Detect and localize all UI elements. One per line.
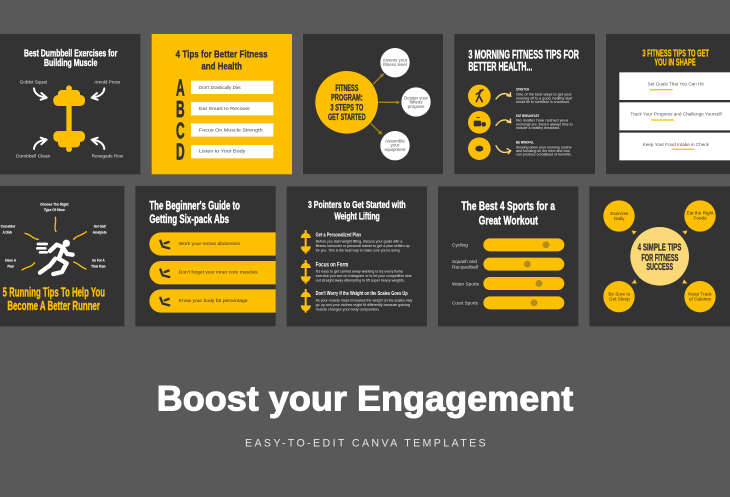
tip text: mindful: BE MINDFUL <box>516 140 534 145</box>
heading: shape tips: YOU IN SHAPE <box>654 58 696 69</box>
panel: morning tips <box>454 34 595 174</box>
step circles: program <box>408 104 425 109</box>
main title: Boost your Engagement <box>157 380 574 419</box>
tip boxes: Eat Smart to Recover <box>199 106 250 112</box>
step circles: fitness level <box>383 62 407 67</box>
tip text: stretch: STRETCH <box>516 87 529 92</box>
heading: morning tips: 3 MORNING FITNESS TIPS FOR <box>468 47 579 61</box>
tip text: mindful: can produce a boatload of benefits. <box>516 153 572 157</box>
pills: Know your body fat percentage <box>179 298 248 303</box>
heading: six-pack abs: The Beginner's Guide to <box>149 198 240 212</box>
heading: dumbbell exercises <box>24 49 117 69</box>
heading: best sports: The Best 4 Sports for a <box>461 199 555 213</box>
letters A to D: A <box>176 75 185 101</box>
heading: dumbbell exercises: Best Dumbbell Exercises for <box>24 49 117 60</box>
step circles <box>380 48 431 160</box>
panel: six-pack abs <box>135 186 276 326</box>
tip circles: Eat the Right <box>687 210 714 215</box>
running tip labels: Trial Run <box>91 263 106 268</box>
tip text: breakfast: mornings are, there's always time to <box>516 122 573 126</box>
tip text: breakfast: EAT BREAKFAST <box>516 113 540 118</box>
tip boxes <box>191 81 273 158</box>
panel: weight lifting <box>287 186 427 326</box>
tip text: stretch <box>516 87 572 104</box>
sport labels: Squash and <box>452 259 477 265</box>
pointer: personalized plan: fitness instructor or personal trainer to get a plan written up <box>316 244 410 248</box>
heading: morning tips <box>468 47 579 74</box>
icon: runner <box>37 240 73 274</box>
center circle <box>630 227 689 286</box>
tip text: breakfast <box>516 113 573 130</box>
heading: four tips: 4 Tips for Better Fitness <box>176 50 268 61</box>
triangle pointers <box>632 230 687 284</box>
tip text: breakfast: No matter how rushed your <box>516 119 569 123</box>
running tip labels <box>1 201 107 268</box>
heading: weight lifting: Weight Lifting <box>334 211 380 222</box>
pointer: weight on scales: go up and your clothes might fit differently because gaining <box>316 303 410 307</box>
heading: best sports <box>461 199 555 228</box>
panel: simple tips <box>589 186 730 326</box>
tip circles: Be Sure to <box>608 291 631 296</box>
tip boxes: Don't Drastically Diet <box>199 85 241 91</box>
tip text: stretch: morning off to a good, healthy start <box>516 96 572 100</box>
running tip labels: Analysis <box>93 230 107 235</box>
running tip labels: Type Of Shoe <box>44 207 65 212</box>
tip text: mindful: and focusing on the here and now <box>516 149 570 153</box>
main circle: GET STARTED <box>328 112 366 122</box>
heading: best sports: Great Workout <box>479 214 538 228</box>
panel: fitness program <box>303 34 443 174</box>
step circles: Design your <box>404 95 428 100</box>
heading: weight lifting: 3 Pointers to Get Started with <box>308 200 406 211</box>
tip circles: of Calories <box>689 296 712 301</box>
pointer: focus on form: It's easy to get carried away wanting to try every funky <box>316 270 403 274</box>
heading: morning tips: BETTER HEALTH... <box>468 60 532 74</box>
icons: dumbbells <box>301 230 311 313</box>
heading: shape tips <box>642 48 709 69</box>
pointer: focus on form: out straight away attempting to lift super heavy weights. <box>316 278 405 282</box>
sport labels: Water Sports <box>452 281 480 287</box>
center circle: SUCCESS <box>646 262 673 273</box>
pointer: focus on form: exercise you see on Instagram or to let your competitive side <box>316 274 412 278</box>
heading: four tips <box>176 50 268 72</box>
panel: dumbbell exercises <box>0 34 140 174</box>
tip cards: Keep Your Food Intake in Check <box>643 142 710 147</box>
pills: Don't forget your inner core muscles <box>179 270 258 275</box>
tip text: mindful: Slowing down your morning routine <box>516 145 572 149</box>
tip circles <box>603 200 716 312</box>
pointer: weight on scales: muscle changes your body composition. <box>316 307 380 311</box>
tip cards: Set Goals That You Can Hit <box>648 82 704 87</box>
exercise labels: Dumbbell Clean <box>16 153 51 158</box>
letters A to D: C <box>176 117 185 143</box>
pointer: personalized plan: Get a Personalized Plan <box>316 232 361 238</box>
pointer: weight on scales: Don't Worry If the Weight on the Scales Goes Up <box>316 291 408 297</box>
pointer: focus on form: Focus on Form <box>316 262 348 269</box>
heading: six-pack abs: Getting Six-pack Abs <box>149 212 229 226</box>
tip boxes: Listen to Your Body <box>199 149 246 155</box>
letters A to D <box>176 75 185 165</box>
tip circles: Get Sleep <box>609 296 630 301</box>
pointer: weight on scales: As your muscle mass increases the weight on the scales may <box>316 299 413 303</box>
exercise labels: Goblet Squat <box>20 79 48 84</box>
sport bars <box>483 238 564 309</box>
running tip labels: Have A <box>5 257 16 262</box>
heading: running tips: Become A Better Runner <box>7 299 100 313</box>
step circles: Assemble <box>385 138 405 143</box>
tip text: stretch: One of the best ways to get your <box>516 93 572 97</box>
letters A to D: D <box>176 139 185 165</box>
pointer: focus on form <box>316 262 412 282</box>
heading: running tips <box>3 286 105 313</box>
panel: running tips <box>0 186 124 326</box>
main circle: FITNESS <box>335 83 358 93</box>
pills: Work your rectus abdominis <box>179 241 241 246</box>
heading: six-pack abs <box>149 198 240 226</box>
tip text: stretch: would be to schedule in a workout. <box>516 100 570 104</box>
arrows: program steps <box>371 73 400 134</box>
running tip labels: Consider <box>1 224 16 229</box>
center circle: 4 SIMPLE TIPS <box>638 243 682 254</box>
tip circles: Keep Track <box>688 291 712 296</box>
tip icons <box>468 85 491 160</box>
running tip labels: A Dish <box>3 230 12 235</box>
tip cards <box>619 72 730 160</box>
pointer: personalized plan: for you. This is the best way to make sure you're doing. <box>316 248 401 252</box>
step circles: equipment <box>385 147 406 152</box>
sport labels: Court Sports <box>452 300 479 306</box>
step circles: your <box>391 143 400 148</box>
arrows: exercises <box>34 88 104 149</box>
running tip labels: Choose The Right <box>40 201 69 206</box>
tip circles: Exercise <box>610 211 629 216</box>
panel: four tips <box>152 34 292 174</box>
letters A to D: B <box>176 96 185 122</box>
heading: weight lifting <box>308 200 406 222</box>
exercise labels: Renegade Row <box>92 153 124 158</box>
tip circles: Daily <box>614 216 625 221</box>
main circle: PROGRAM: <box>331 93 363 103</box>
squiggle arrows <box>22 217 86 270</box>
subtitle: EASY-TO-EDIT CANVA TEMPLATES <box>245 437 486 449</box>
tip cards: Track Your Progress and Challenge Yourself <box>630 112 722 117</box>
center circle: FOR FITNESS <box>641 253 679 264</box>
running tip labels: Go For A <box>92 257 105 262</box>
icon: dumbbell <box>53 85 85 152</box>
tip text: mindful <box>516 140 572 157</box>
heading: running tips: 5 Running Tips To Help You <box>3 286 105 300</box>
panel: best sports <box>438 186 578 326</box>
running tip labels: Plan <box>7 263 14 268</box>
sport labels: Cycling <box>452 242 468 248</box>
tip text: breakfast: include a healthy breakfast. <box>516 126 560 130</box>
pointer: weight on scales <box>316 291 413 311</box>
main circle: 3 STEPS TO <box>330 102 363 112</box>
pills <box>149 232 276 313</box>
heading: four tips: and Health <box>201 61 242 72</box>
running tip labels: Get Gait <box>94 224 106 229</box>
main circle <box>315 71 378 134</box>
step circles: Assess your <box>383 58 408 63</box>
exercise labels <box>16 79 124 158</box>
panel: shape tips <box>606 34 730 174</box>
sport labels <box>452 242 480 306</box>
tip boxes: Focus On Muscle Strength <box>199 127 263 133</box>
step circles: fitness <box>410 100 423 105</box>
curved arrows <box>496 93 511 154</box>
tip circles: Foods <box>694 215 707 220</box>
sport labels: Racquetball <box>452 264 478 270</box>
pointer: personalized plan: Before you start weight lifting, discuss your goals with a <box>316 240 402 244</box>
heading: dumbbell exercises: Building Muscle <box>44 58 98 69</box>
exercise labels: Arnold Press <box>94 79 121 84</box>
pointer: personalized plan <box>316 232 410 252</box>
